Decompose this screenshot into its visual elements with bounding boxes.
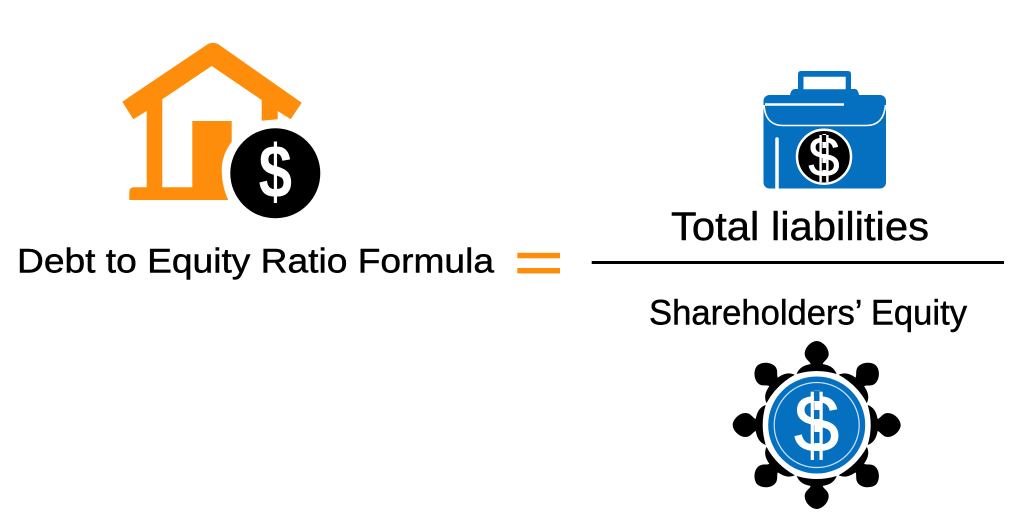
briefcase body	[764, 95, 886, 188]
body highlight	[775, 139, 779, 188]
icon: shareholders around a dollar coin	[733, 341, 901, 509]
heading: formula name: Debt to Equity Ratio Formula	[17, 242, 494, 280]
house shape	[122, 43, 302, 200]
blue coin	[768, 376, 865, 474]
dollar coin: $	[259, 131, 292, 214]
equals sign	[517, 253, 560, 273]
blue coin: $	[794, 379, 840, 470]
denominator: shareholders' equity: Shareholders’ Equity	[649, 293, 967, 332]
flap outline	[764, 105, 886, 126]
icon: blue briefcase with dollar	[764, 71, 886, 188]
fraction line	[592, 261, 1004, 264]
icon: orange house with dollar coin	[122, 43, 320, 218]
flap highlight	[765, 103, 844, 106]
numerator: total liabilities: Total liabilities	[671, 205, 929, 249]
dollar coin	[230, 128, 320, 218]
dollar coin: $	[808, 125, 840, 188]
people ring	[733, 341, 901, 509]
briefcase handle	[790, 71, 859, 95]
